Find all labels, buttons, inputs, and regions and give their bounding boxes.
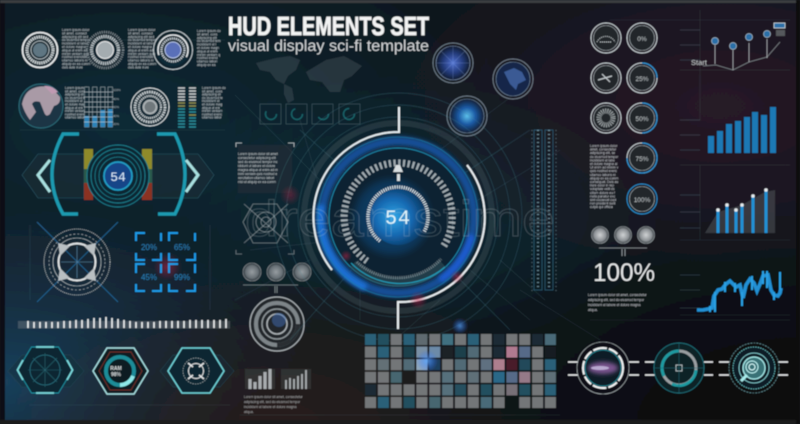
text block: right column: voluptate velit es xyxy=(590,187,615,191)
text block: incididunt ut xyxy=(65,99,83,103)
text block 1: do eiusmod tempor xyxy=(62,38,91,42)
text block 1: ullamco laboris ni xyxy=(62,59,88,63)
panel: four small gauges xyxy=(260,104,360,124)
level bars: 40% xyxy=(113,114,119,118)
white arc upper left xyxy=(313,107,399,270)
text block 3: nostrud exerci xyxy=(197,56,218,60)
dark inner field xyxy=(328,147,468,287)
panel: three globes xyxy=(433,43,533,136)
text block: right column: quis nostrud exerc xyxy=(590,169,617,173)
panel: 100% readout xyxy=(588,226,655,312)
panel: bottom hexagons xyxy=(8,347,234,394)
ring with teal arcs xyxy=(654,343,704,393)
blue glow ring xyxy=(322,141,474,293)
hex donut gauge: RAM xyxy=(110,366,122,372)
radar circle 2 xyxy=(87,32,123,68)
row 6 xyxy=(365,397,556,408)
panel: bracketed gauge xyxy=(22,134,214,214)
panel: lorem text box: ididunt ut labore et dolore xyxy=(238,164,275,168)
hex donut gauge: 98% xyxy=(111,372,122,378)
outer tick ring xyxy=(344,163,452,261)
caption: incididunt ut labore et dolore magna xyxy=(588,303,641,307)
text block: do eiusmod te xyxy=(65,96,86,100)
center gauge xyxy=(87,145,149,207)
left chevron arrow xyxy=(38,160,50,192)
icon: wireframe hexagon xyxy=(236,204,294,254)
panel: lorem text box xyxy=(236,143,294,193)
text block 1: et dolore magna xyxy=(62,45,86,49)
big percent value: 100% xyxy=(593,259,655,287)
text block: minim veniam xyxy=(202,109,223,113)
panel: lorem text box: sed do eiusmod tempor inc xyxy=(238,160,278,164)
text block: right column: do eiusmod tempor xyxy=(590,155,619,159)
value 99%: 99% xyxy=(174,273,190,282)
grid glow xyxy=(416,350,438,372)
text block: right column: irure dolor in rep xyxy=(590,184,614,188)
text block: adipiscing eli xyxy=(65,93,84,97)
text block: incididunt ut xyxy=(202,99,220,103)
text block 1: incididunt ut labor xyxy=(62,42,89,46)
text block 2: minim veniam quis xyxy=(128,52,156,56)
row 3 xyxy=(365,359,556,370)
three small balls xyxy=(592,226,654,256)
text block: nostrud exerc xyxy=(202,112,222,116)
value 45%: 45% xyxy=(141,273,157,282)
value 65%: 65% xyxy=(174,243,190,252)
world map xyxy=(256,56,362,103)
glow xyxy=(153,253,181,281)
level bars: 20% xyxy=(113,122,119,126)
dial arrows xyxy=(591,63,621,93)
chart: pinned route xyxy=(691,23,785,70)
panel: right dials column xyxy=(591,23,657,214)
text block 3: aliqua ut enim xyxy=(197,49,218,53)
level bars: 80% xyxy=(113,97,119,101)
dial 0%: 0% xyxy=(637,36,647,43)
caption: aliqua. xyxy=(588,308,598,312)
text block: sit amet, cons xyxy=(202,89,223,93)
text block: right column: sint occaecat cupi xyxy=(590,198,616,202)
row 5 xyxy=(365,384,556,395)
title: HUD ELEMENTS SET xyxy=(228,11,429,41)
left status bar xyxy=(84,149,93,200)
text block: right column: aliquip ex ea comm xyxy=(590,176,619,180)
label Start: Start xyxy=(691,58,708,67)
ring with nebula xyxy=(577,342,629,394)
panel: lorem text box: inim veniam quis nostrud e xyxy=(238,172,277,176)
dial dotted xyxy=(591,103,621,133)
panel: grid heatmap xyxy=(365,334,556,408)
hex radar xyxy=(160,348,234,393)
text block 1: duis aute irure xyxy=(62,65,83,69)
text block: right column: incididunt ut labo xyxy=(590,158,615,162)
icon: earth globe xyxy=(19,84,63,128)
text block: right column: non proident sunt xyxy=(590,202,616,206)
globe 1 xyxy=(433,43,473,83)
hex crosshair xyxy=(8,347,84,393)
text block: aliqua ut eni xyxy=(65,106,83,110)
panel: lorem text box: nisi ut aliquip ex ea comm xyxy=(238,180,276,184)
text block 3: ullamco labori xyxy=(197,60,218,64)
text block 2: et dolore magna xyxy=(128,45,152,49)
text block: aliqua ut eni xyxy=(202,106,220,110)
text block 2: incididunt ut labor xyxy=(128,42,155,46)
text block 3: Lorem ipsum do xyxy=(197,29,221,33)
outer faint rings xyxy=(274,93,530,341)
dial 25%: 25% xyxy=(635,76,649,83)
row 2 xyxy=(365,347,556,358)
right chevron arrow xyxy=(186,160,198,192)
ruler scale xyxy=(18,317,230,328)
text block 2: duis aute irure xyxy=(128,65,149,69)
subtitle: visual display sci-fi template xyxy=(228,38,429,55)
globe 3 xyxy=(447,96,487,136)
value 20%: 20% xyxy=(141,243,157,252)
panel: lorem text box: xercitation ullamco labori xyxy=(238,176,275,180)
text block: sit amet, cons xyxy=(65,89,86,93)
text block 2: aliquip ex ea comm xyxy=(128,62,157,66)
level bars: 100% xyxy=(113,88,121,92)
dial 100% xyxy=(627,184,657,214)
panel: vertical dotted columns xyxy=(532,130,556,292)
text block: right column: Ut enim ad minim v xyxy=(590,166,619,170)
lower arc data band xyxy=(351,259,445,284)
caption: Lorem ipsum dolor sit amet, consectetur xyxy=(588,293,648,297)
text block: right column: nulla pariatur exc xyxy=(590,194,615,198)
dial 75%: 75% xyxy=(635,156,649,163)
text block: right column: amet, consectetur xyxy=(590,148,617,152)
top marker xyxy=(393,165,403,181)
connector dashes xyxy=(568,362,788,375)
text block 1: aliqua ut enim ad xyxy=(62,48,87,52)
dial 100%: 100% xyxy=(634,197,651,204)
panel: top-left radar row xyxy=(22,28,221,70)
text block: right column: Lorem ipsum dolor xyxy=(590,144,618,148)
inner tick ring xyxy=(368,187,428,241)
right bracket arc xyxy=(157,134,185,214)
text block: right column: consequat. Duis au xyxy=(590,180,618,184)
caption text: Lorem ipsum dolor sit amet, consectetur xyxy=(244,395,304,399)
panel: globe and level bars row xyxy=(19,84,226,128)
chart: candlestick line xyxy=(697,271,781,312)
text block 1: minim veniam quis xyxy=(62,52,90,56)
level bars xyxy=(84,87,121,127)
text block: right column: adipiscing elit, se xyxy=(590,151,615,155)
caption text: aliqua. xyxy=(244,410,254,414)
caption text: adipiscing elit, sed do eiusmod tempor xyxy=(244,400,301,404)
text block 3: sit amet, cons xyxy=(197,32,218,36)
panel: lorem text box: consectetur adipiscing elit xyxy=(238,156,276,160)
radar circle 4 xyxy=(131,88,169,126)
left bracket arc xyxy=(52,134,79,214)
text block 3: aliquip ex ea xyxy=(197,63,216,67)
center gauge: 54 xyxy=(110,170,126,185)
dial speedometer xyxy=(591,23,621,53)
text block: Lorem ipsum do xyxy=(65,86,89,90)
stacked level bars xyxy=(178,88,196,127)
text block 2: adipiscing elit sed xyxy=(128,35,154,39)
text block 3: adipiscing elit xyxy=(197,36,217,40)
panel: central HUD dial xyxy=(274,93,530,341)
text block 2: Lorem ipsum dolor xyxy=(128,28,156,32)
panel: lorem text box: Lorem ipsum dolor sit amet xyxy=(238,152,278,156)
title xyxy=(228,11,429,55)
row 1 xyxy=(365,334,556,345)
panel: small grey bar charts xyxy=(244,369,311,414)
text block 3: minim veniam q xyxy=(197,53,220,57)
text block: adipiscing eli xyxy=(202,93,221,97)
hex donut gauge xyxy=(93,348,148,394)
text block: right column: cillum dolore eu f xyxy=(590,191,615,195)
radar circle 3 xyxy=(154,30,192,70)
text block: nostrud exerc xyxy=(65,112,85,116)
text block: et dolore mag xyxy=(65,102,85,106)
icon: crosshair wheel xyxy=(37,222,118,302)
panel: percent brackets xyxy=(136,233,195,291)
text block 1: adipiscing elit sed xyxy=(62,35,88,39)
text block 1: Lorem ipsum dolor xyxy=(62,28,90,32)
icon: grey dial xyxy=(250,297,304,351)
text block 3: incididunt ut l xyxy=(197,43,217,47)
dial 25% xyxy=(627,63,657,93)
decorative glows xyxy=(280,185,468,334)
bar chart: blue xyxy=(708,107,776,153)
brackets xyxy=(136,233,195,291)
text block 1: sit amet, consect xyxy=(62,31,87,35)
text block: right column: ullamco laboris ni xyxy=(590,173,616,177)
dial 50%: 50% xyxy=(635,116,649,123)
hexagon backplate xyxy=(22,154,214,198)
dial 0% xyxy=(627,23,657,53)
value 54: 54 xyxy=(385,208,411,231)
chart: lollipop bars xyxy=(705,188,775,233)
text block: ullamco labor xyxy=(65,116,86,120)
text block: right column: et dolore magna al xyxy=(590,162,618,166)
panel: lorem text box: magna aliqua ut enim ad m xyxy=(238,168,278,172)
dial 50% xyxy=(627,103,657,133)
text block 2: sit amet, consect xyxy=(128,31,153,35)
dial 75% xyxy=(627,143,657,173)
text block 1: nostrud exercitati xyxy=(62,55,87,59)
center disc xyxy=(354,179,430,255)
bar chart 1 xyxy=(245,369,275,389)
globe 2 xyxy=(493,59,533,99)
panel: bottom right rings xyxy=(568,342,788,394)
ring with cyan target xyxy=(729,343,779,393)
text block: Lorem ipsum do xyxy=(202,86,226,90)
text block 2: aliqua ut enim ad xyxy=(128,48,153,52)
text block 3: et dolore magn xyxy=(197,46,219,50)
panel: three small balls xyxy=(243,263,311,293)
text block: ullamco labor xyxy=(202,116,223,120)
caption: adipiscing elit, sed do eiusmod tempor xyxy=(588,298,645,302)
sparks xyxy=(340,250,352,262)
level bars: 60% xyxy=(113,105,119,109)
row 4 xyxy=(365,372,556,383)
text block 2: do eiusmod tempor xyxy=(128,38,157,42)
text block 2: nostrud exercitati xyxy=(128,55,153,59)
bar chart 2 xyxy=(281,369,311,389)
text block: right column: culpa qui officia xyxy=(590,205,613,209)
text block 2: ullamco laboris ni xyxy=(128,59,154,63)
grey shadow arc xyxy=(304,123,492,311)
white arc lower right xyxy=(398,165,485,329)
text block: minim veniam xyxy=(65,109,86,113)
right status bar xyxy=(142,149,152,200)
watermark: dreamstime xyxy=(245,191,555,247)
text block: do eiusmod te xyxy=(202,96,223,100)
radar circle 1 xyxy=(22,32,58,68)
text block: et dolore mag xyxy=(202,102,222,106)
caption text: incididunt ut labore et dolore magna xyxy=(244,405,297,409)
text block 1: aliquip ex ea comm xyxy=(62,62,91,66)
text block 3: do eiusmod tem xyxy=(197,39,221,43)
